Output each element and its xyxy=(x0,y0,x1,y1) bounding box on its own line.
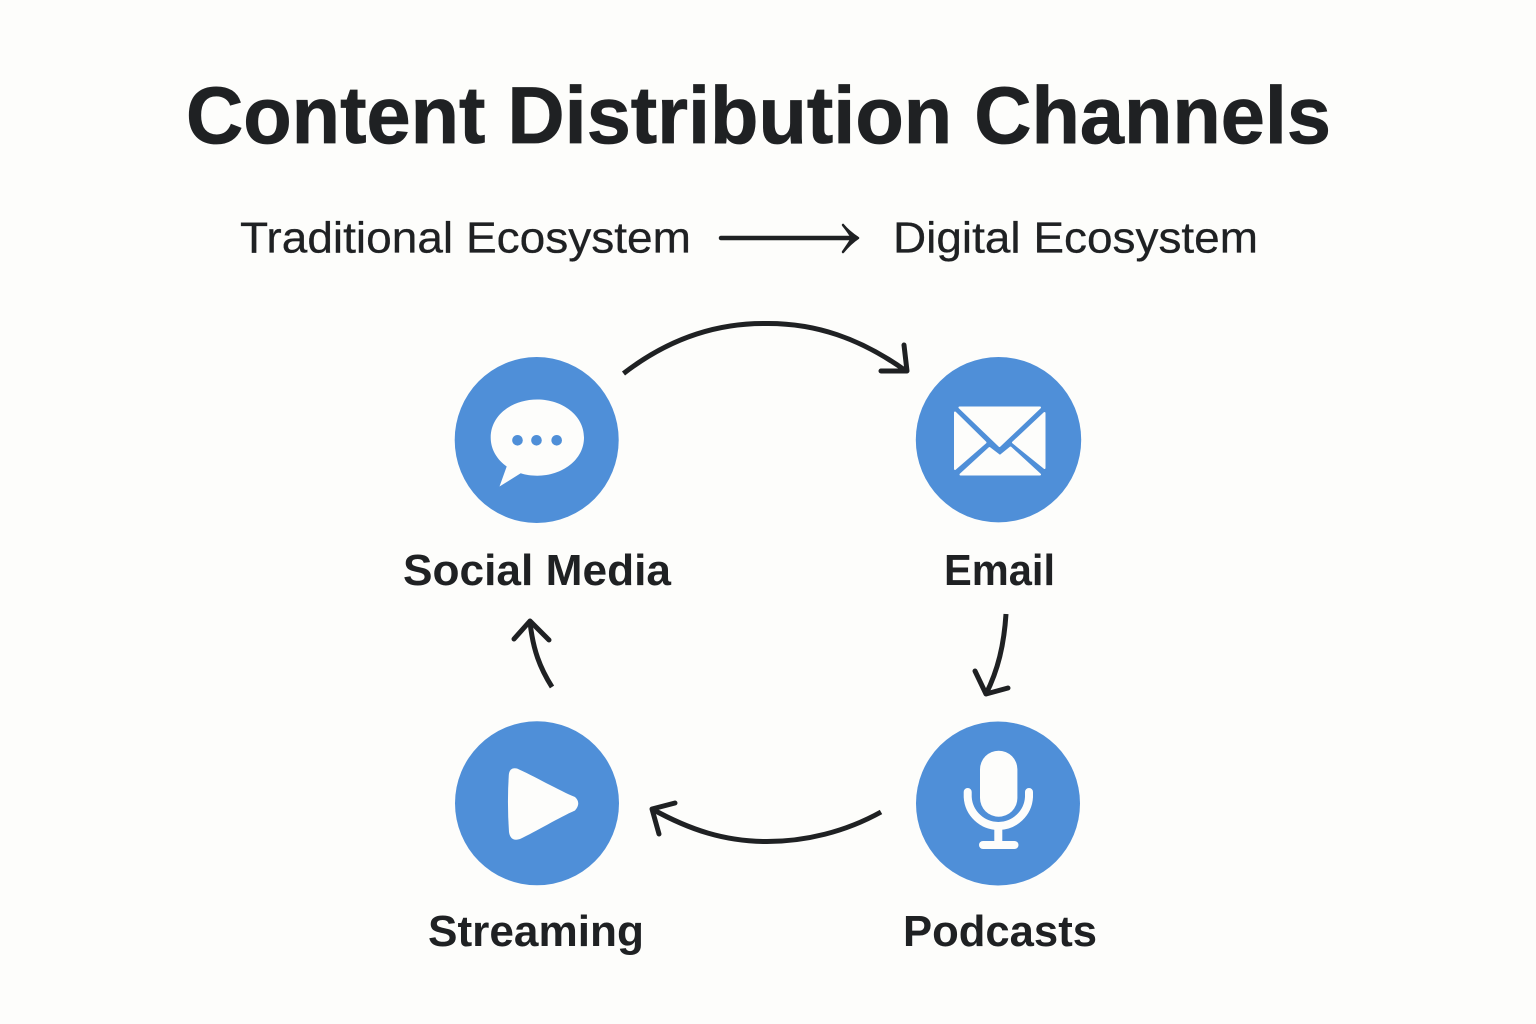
node: podcasts xyxy=(903,722,1097,956)
icon: email envelope xyxy=(916,357,1081,522)
arrow: email to podcasts xyxy=(975,614,1008,694)
node: social media xyxy=(403,357,672,595)
arrow: streaming to social media xyxy=(514,621,552,687)
label: email: Email xyxy=(944,546,1055,595)
node: streaming xyxy=(428,721,644,956)
subtitle: digital ecosystem: Digital Ecosystem xyxy=(893,214,1258,262)
node: email xyxy=(916,357,1081,595)
icon: streaming play button xyxy=(455,721,619,885)
title: Content Distribution Channels xyxy=(186,71,1331,161)
label: social media: Social Media xyxy=(403,546,672,595)
label: streaming: Streaming xyxy=(428,907,644,956)
arrow: podcasts to streaming xyxy=(652,803,881,842)
label: podcasts: Podcasts xyxy=(903,907,1097,956)
icon: social media chat bubble xyxy=(455,357,619,523)
arrow: social media to email xyxy=(624,323,907,374)
subtitle: traditional ecosystem: Traditional Ecosystem xyxy=(240,214,691,262)
icon: podcasts microphone xyxy=(916,722,1080,886)
arrow: traditional to digital xyxy=(721,225,858,252)
